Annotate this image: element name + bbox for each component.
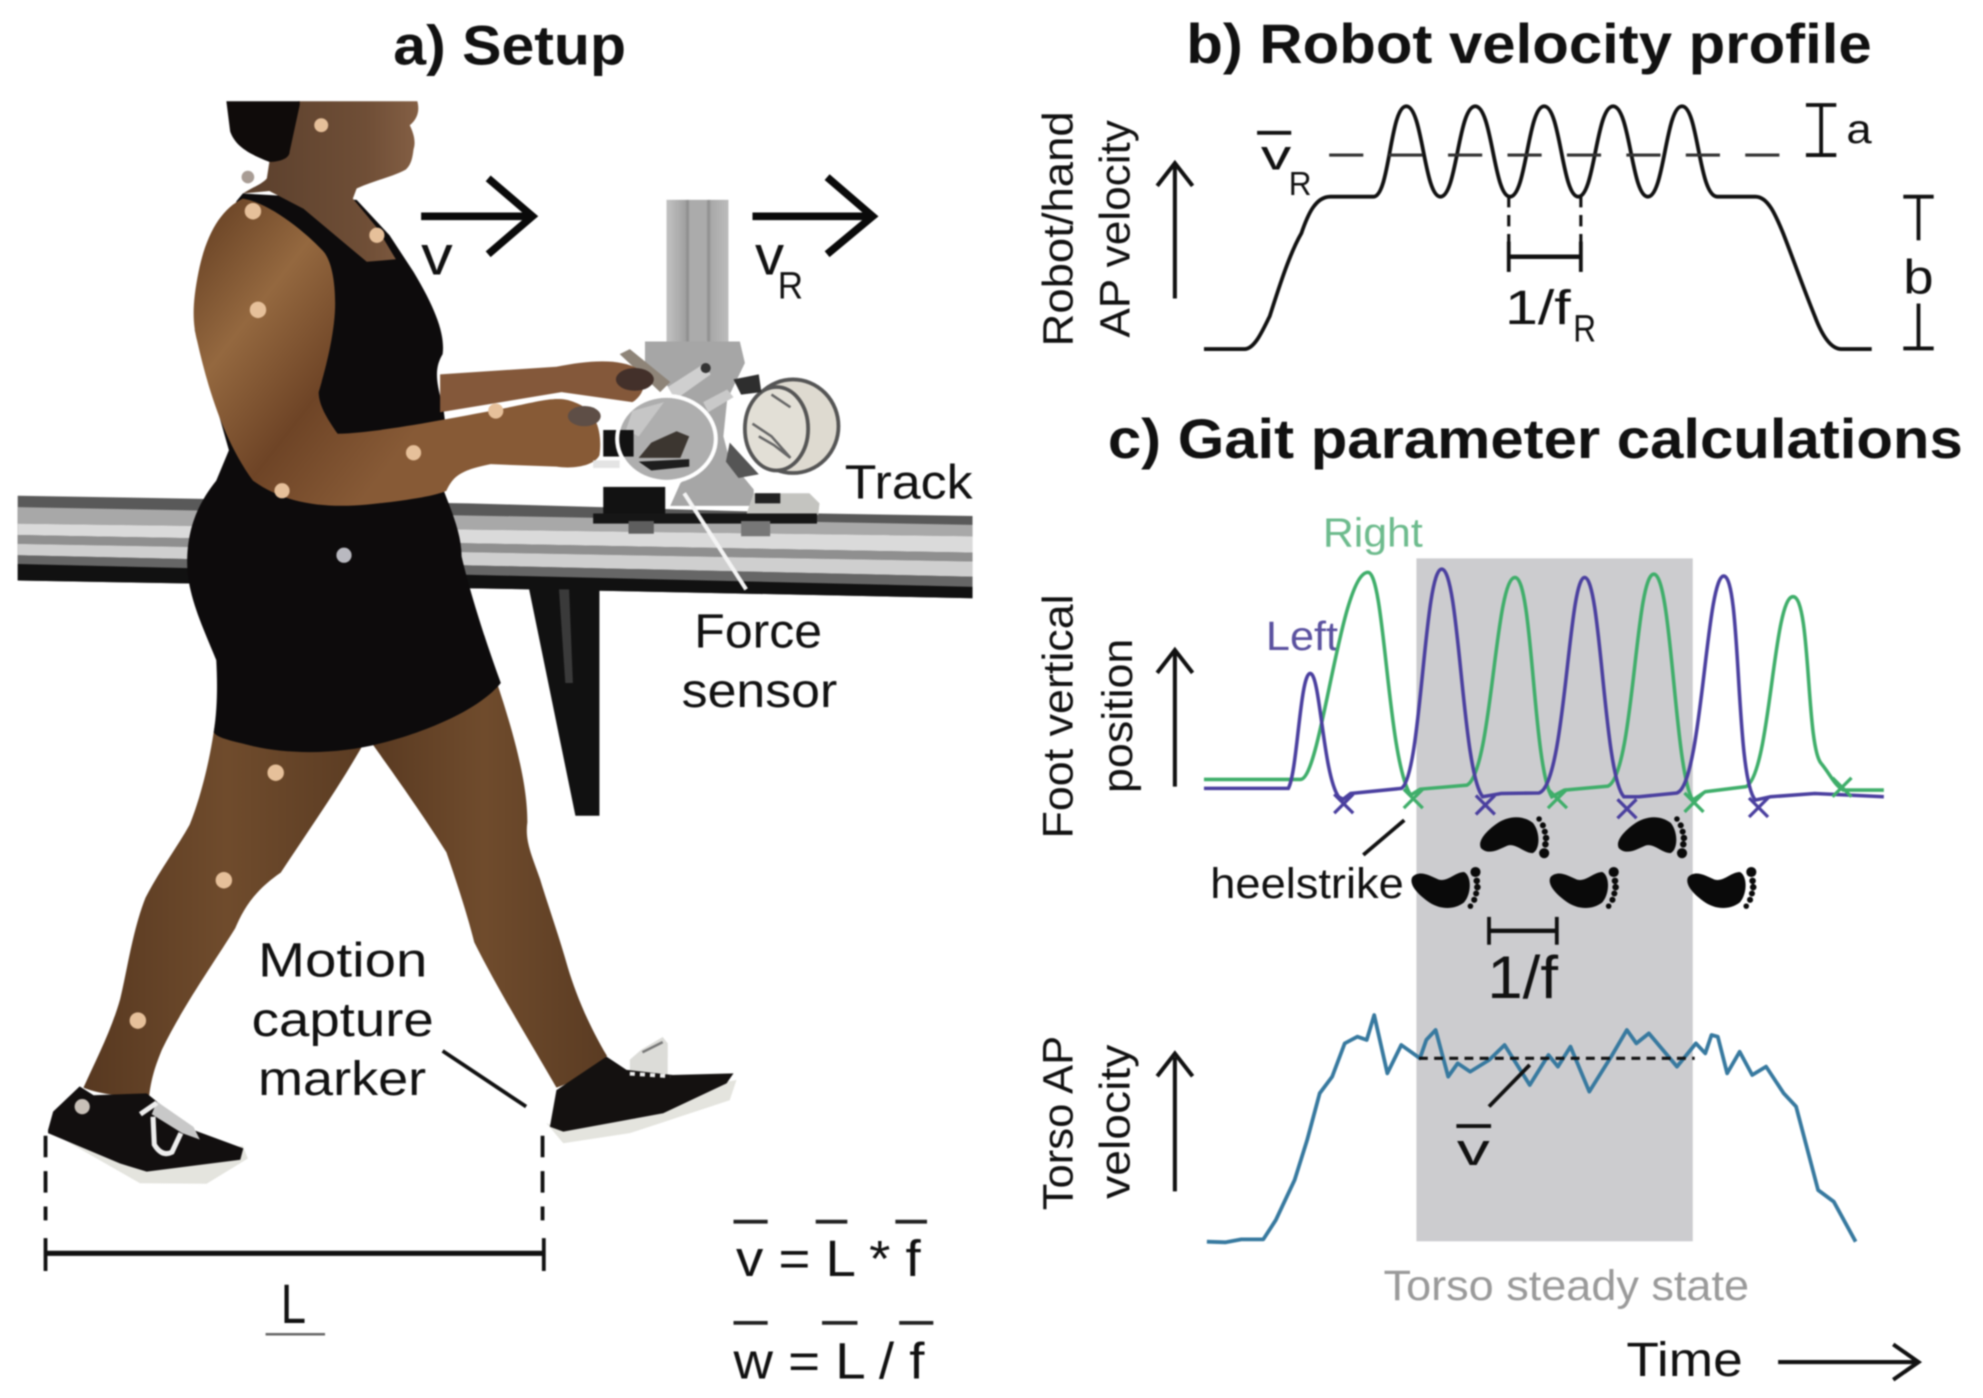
label: mean vR	[1257, 131, 1311, 202]
y-axis label: torso AP velocity: Torso AP	[1034, 1036, 1082, 1210]
force sensor circle	[603, 396, 716, 482]
left foot trace	[1204, 569, 1884, 800]
heelstrike marks: left	[1334, 794, 1768, 818]
footprints	[1411, 816, 1756, 909]
footprint: bottom 2	[1550, 867, 1619, 909]
hair	[226, 101, 300, 162]
arrow: robot velocity vR	[752, 177, 873, 254]
label: motion capture marker: marker	[258, 1053, 426, 1106]
label: track: Track	[845, 456, 974, 509]
label: mean v: v	[1457, 1124, 1490, 1175]
y-axis label: torso AP velocity	[1034, 1036, 1139, 1210]
label: L: L	[281, 1273, 306, 1335]
y-axis label: foot vertical position: Foot vertical	[1034, 594, 1082, 838]
leader: motion capture marker	[443, 1051, 526, 1107]
label: time: Time	[1626, 1334, 1743, 1387]
footprint: top 1	[1480, 816, 1549, 858]
label: motion capture marker: capture	[252, 994, 434, 1047]
label: vR: v	[755, 224, 784, 286]
label: 1/fR	[1505, 282, 1596, 350]
equation: w = L / f: w = L / f	[732, 1333, 925, 1390]
label: right: Right	[1323, 509, 1423, 555]
label: b: b	[1903, 251, 1934, 304]
heelstrike marks: right	[1404, 778, 1851, 812]
front arm	[194, 199, 600, 506]
label: mean v	[1456, 1124, 1491, 1175]
leader: mean v	[1489, 1065, 1530, 1107]
mean torso velocity dashed line	[1419, 1057, 1695, 1060]
arrow: foot axis	[1157, 650, 1193, 787]
hand grips	[568, 368, 654, 468]
arrow: y axis	[1157, 163, 1193, 298]
label: a: a	[1846, 106, 1872, 152]
label: torso steady state: Torso steady state	[1384, 1262, 1749, 1310]
panel: setup	[18, 15, 974, 1390]
head and neck	[243, 101, 418, 262]
L underline	[266, 1333, 325, 1335]
label: heelstrike: heelstrike	[1210, 860, 1404, 908]
rear leg	[83, 708, 369, 1096]
arrow: time	[1778, 1344, 1919, 1380]
back forearm	[440, 361, 644, 412]
robot	[593, 200, 838, 536]
front shoe	[546, 1037, 737, 1143]
dress	[187, 194, 501, 752]
y-axis label: foot vertical position	[1034, 594, 1142, 838]
heading: b) Robot velocity profile: b) Robot velocity profile	[1186, 13, 1872, 75]
heading: c) Gait parameter calculations: c) Gait parameter calculations	[1108, 408, 1963, 470]
label: 1/fR: 1/f	[1505, 282, 1572, 335]
label: mean vR: R	[1289, 165, 1311, 202]
panel: robot velocity profile	[1034, 13, 1934, 350]
label: vR: R	[778, 265, 803, 307]
mean velocity dashed line	[1329, 154, 1781, 156]
leader: force sensor	[684, 493, 746, 589]
leader: heelstrike	[1363, 820, 1404, 855]
velocity curve	[1204, 106, 1872, 349]
robot rods	[620, 349, 734, 412]
heading: a) Setup: a) Setup	[393, 15, 626, 77]
front leg	[360, 683, 607, 1088]
amplitude bracket a	[1806, 105, 1836, 155]
robot column	[666, 200, 728, 344]
right foot trace	[1204, 572, 1884, 800]
y-axis label: robot/hand AP velocity	[1034, 111, 1139, 347]
label: 1/f: 1/f	[1487, 943, 1558, 1011]
track bracket	[529, 587, 599, 816]
rear shoe	[48, 1086, 248, 1184]
label: motion capture marker	[252, 934, 434, 1106]
period bracket 1/fR	[1509, 196, 1581, 272]
offset bracket b	[1903, 197, 1934, 348]
arrow: torso axis	[1157, 1053, 1193, 1191]
label: 1/fR: R	[1573, 308, 1596, 350]
track rail	[18, 496, 973, 598]
label: vR	[755, 224, 803, 307]
step period bracket 1/f	[1489, 917, 1557, 945]
step length bracket L	[46, 1136, 544, 1271]
torso steady state shaded band	[1416, 558, 1693, 1241]
panel: gait parameter calculations	[1034, 408, 1963, 1387]
label: left: Left	[1266, 613, 1338, 659]
arrow: walking velocity v	[421, 178, 532, 254]
y-axis label: torso AP velocity: velocity	[1091, 1044, 1139, 1199]
label: force sensor	[682, 606, 837, 718]
label: force sensor: Force	[694, 606, 822, 659]
label: force sensor: sensor	[682, 665, 837, 718]
footprint: bottom 3	[1687, 867, 1756, 909]
person	[48, 101, 737, 1184]
robot base	[746, 493, 820, 515]
label: mean vR: v	[1261, 131, 1292, 179]
torso velocity trace	[1207, 1015, 1856, 1242]
label: motion capture marker: Motion	[258, 934, 427, 987]
motion capture markers	[75, 118, 503, 1114]
footprint: bottom 1	[1411, 867, 1481, 909]
label: v: v	[421, 224, 453, 286]
robot discs	[726, 374, 838, 478]
y-axis label: foot vertical position: position	[1094, 639, 1142, 793]
footprint: top 2	[1618, 816, 1687, 858]
y-axis label: robot/hand AP velocity: Robot/hand	[1034, 111, 1082, 347]
equation: v = L * f: v = L * f	[736, 1230, 922, 1287]
y-axis label: robot/hand AP velocity: AP velocity	[1091, 120, 1139, 338]
